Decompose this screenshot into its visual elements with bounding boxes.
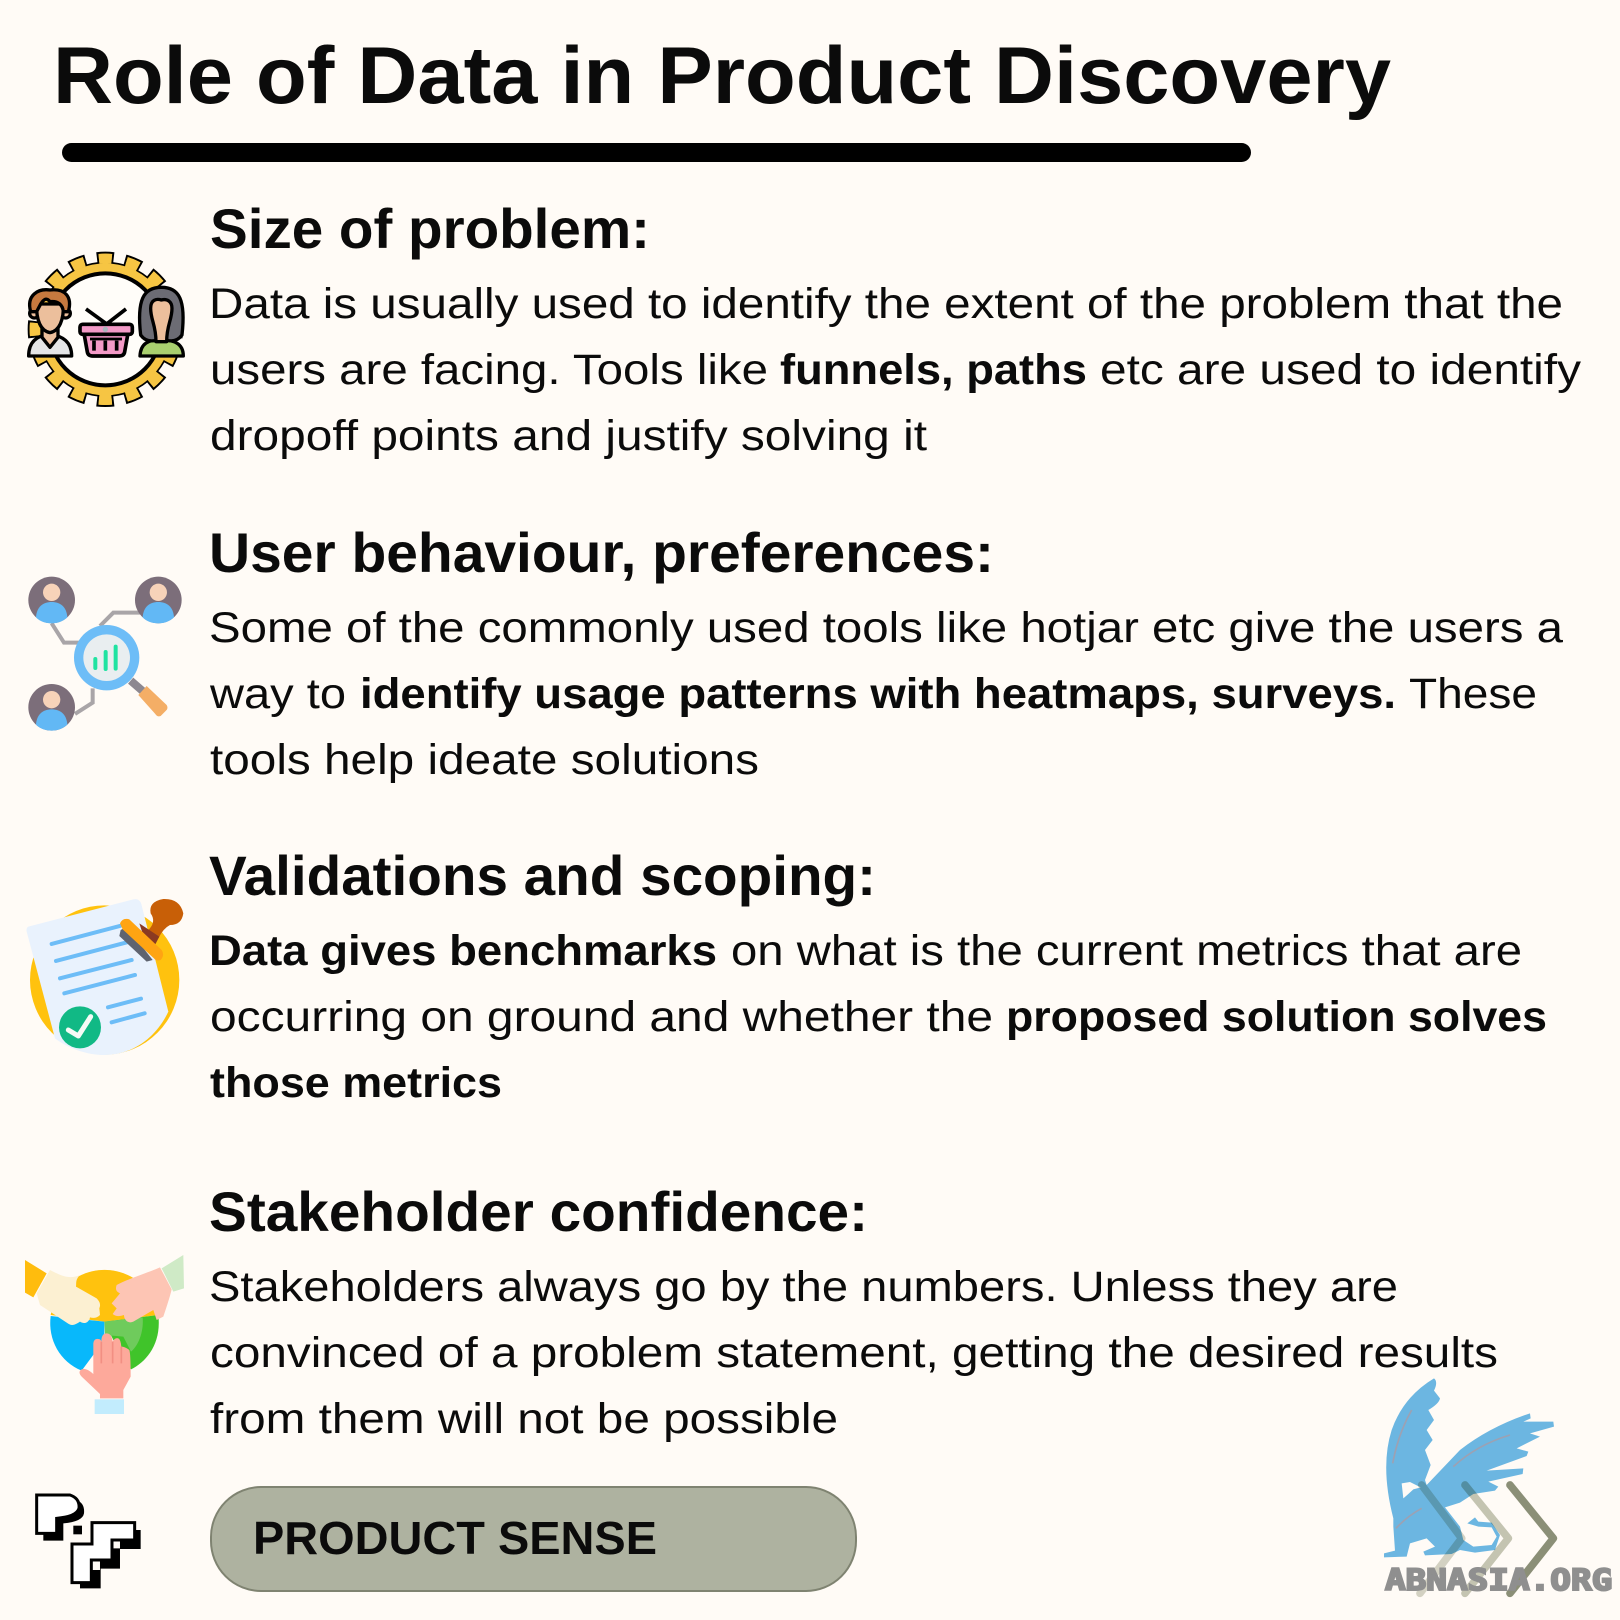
panel: size of problem [29, 197, 1582, 460]
heading: size of problem: Size of problem: [210, 197, 650, 260]
icon: gear with two users and basket [29, 258, 183, 401]
icon: document with stamp and check [27, 899, 183, 1055]
panel: user behaviour [28, 521, 1563, 784]
watermark text: ABNASIA.ORG [1385, 1563, 1612, 1597]
griffin [1384, 1378, 1554, 1557]
text block: validations and scoping [209, 927, 1547, 1107]
icon: person left [29, 290, 72, 356]
panel: validations and scoping [27, 844, 1547, 1107]
text block: size of problem: dropoff points and justify solving it [210, 412, 927, 460]
icon: user top right [135, 577, 182, 623]
heading: validations and scoping: Validations and scoping: [209, 844, 876, 907]
text block: user behaviour: identify usage patterns with heatmaps, surveys. [360, 670, 1396, 718]
text block: user behaviour: These [1409, 670, 1537, 718]
text block: validations and scoping: Data gives benchmarks [209, 927, 717, 975]
text block: user behaviour: way to [209, 670, 346, 718]
icon: user bottom left [28, 684, 75, 731]
icon: P block [37, 1495, 84, 1541]
icon: stamp [119, 899, 183, 962]
icon: network of users with magnifier [28, 577, 182, 731]
text block: size of problem: users are facing. Tools like [210, 346, 768, 394]
icon: user top left [28, 577, 75, 623]
heading: stakeholder confidence: Stakeholder confidence: [209, 1180, 868, 1243]
text block: validations and scoping: proposed solution solves [1006, 993, 1547, 1041]
text block: size of problem: etc are used to identify [1100, 346, 1582, 394]
text block: size of problem: Data is usually used to identify the extent of the problem that the [209, 280, 1563, 328]
text block: user behaviour: Some of the commonly used tools like hotjar etc give the users a [209, 604, 1563, 652]
icon: griffin watermark with chevrons [1384, 1378, 1612, 1597]
icon: magnifier [74, 625, 168, 716]
icon: basket [80, 309, 132, 356]
heading: user behaviour: User behaviour, preferences: [209, 521, 994, 584]
chevrons [1420, 1485, 1553, 1593]
text block: size of problem [209, 280, 1582, 460]
icon: hands over globe [25, 1255, 184, 1414]
text block: validations and scoping: on what is the current metrics that are [731, 927, 1522, 975]
text block: user behaviour: tools help ideate solutions [210, 736, 759, 784]
icon: S block [72, 1523, 141, 1588]
icon: green check [59, 1006, 101, 1048]
title: Role of Data in Product Discovery [53, 31, 1391, 121]
callout: product sense pill: PRODUCT SENSE [253, 1512, 657, 1564]
text block: validations and scoping: occurring on ground and whether the [210, 993, 993, 1041]
callout: product sense pill [211, 1487, 856, 1591]
text block: stakeholder confidence [209, 1263, 1498, 1443]
icon: product sense logo [37, 1495, 141, 1588]
text block: user behaviour [209, 604, 1563, 784]
text block: stakeholder confidence: convinced of a problem statement, getting the desired results [210, 1329, 1498, 1377]
text block: stakeholder confidence: from them will not be possible [210, 1395, 838, 1443]
text block: validations and scoping: those metrics [210, 1059, 502, 1107]
text block: size of problem: funnels, paths [780, 346, 1087, 394]
panel: stakeholder confidence [25, 1180, 1498, 1443]
icon: person right [140, 287, 183, 356]
text block: stakeholder confidence: Stakeholders always go by the numbers. Unless they are [209, 1263, 1398, 1311]
